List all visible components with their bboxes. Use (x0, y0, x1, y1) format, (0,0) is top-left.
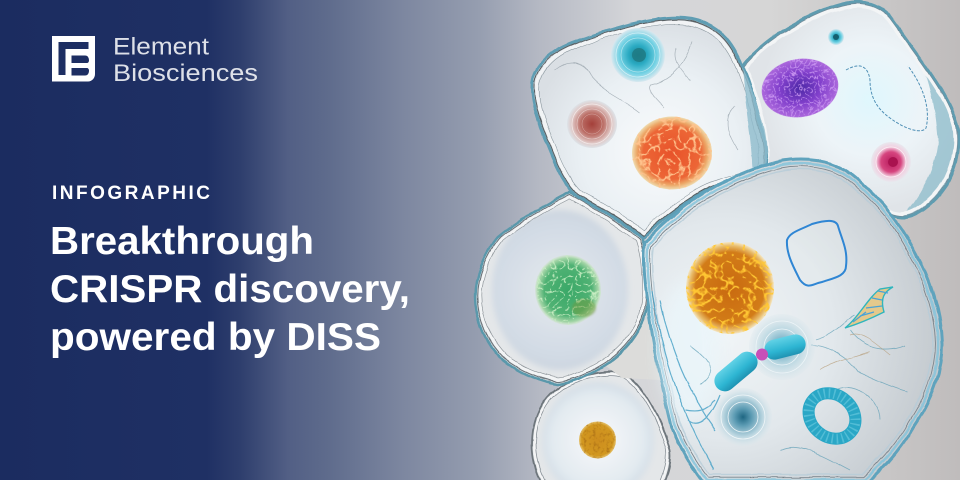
title: CRISPR discovery, (50, 268, 410, 311)
organelle: teal swirl (611, 28, 665, 82)
chromosome (710, 332, 808, 396)
wordmark: Biosciences (113, 60, 258, 87)
title: powered by DISS (50, 316, 381, 359)
title (50, 220, 410, 359)
rim shading right (742, 66, 766, 176)
eyebrow: INFOGRAPHIC: INFOGRAPHIC (52, 183, 210, 204)
ring organelle (799, 384, 865, 448)
nucleus shadow (572, 299, 596, 317)
fine veins right (690, 315, 908, 470)
swirl organelle lower (714, 388, 772, 446)
swirl organelle upper (749, 314, 815, 380)
membrane strand left (652, 290, 720, 470)
rim shading right (902, 64, 959, 217)
bright interior left glow (660, 280, 720, 420)
nucleus: green (535, 255, 601, 325)
cell: green nucleus (475, 192, 648, 384)
DNA ribbon (845, 287, 893, 328)
cell: gold nucleus (532, 372, 671, 480)
title: Breakthrough (50, 220, 314, 263)
organelle: pink swirl (871, 142, 911, 182)
cell: top with orange nucleus (532, 18, 766, 238)
organelle: small teal (828, 29, 844, 45)
illustration: biological cells (475, 2, 959, 480)
thin dashed strand (846, 66, 927, 131)
cell: large with organelles (644, 160, 942, 480)
nucleus: orange textured (686, 242, 774, 334)
veins (555, 42, 738, 150)
wordmark (113, 34, 258, 87)
wordmark: Element (113, 34, 209, 60)
nucleus: purple (757, 53, 843, 123)
nucleus: orange (632, 116, 712, 190)
blue loop (787, 221, 846, 286)
gap between cells (606, 318, 660, 380)
nucleus: gold (579, 422, 616, 458)
logo: Element Biosciences (52, 34, 258, 87)
organelle: red swirl (567, 100, 617, 148)
icon: logo mark (52, 36, 95, 82)
cell: top right with purple nucleus (742, 2, 959, 217)
